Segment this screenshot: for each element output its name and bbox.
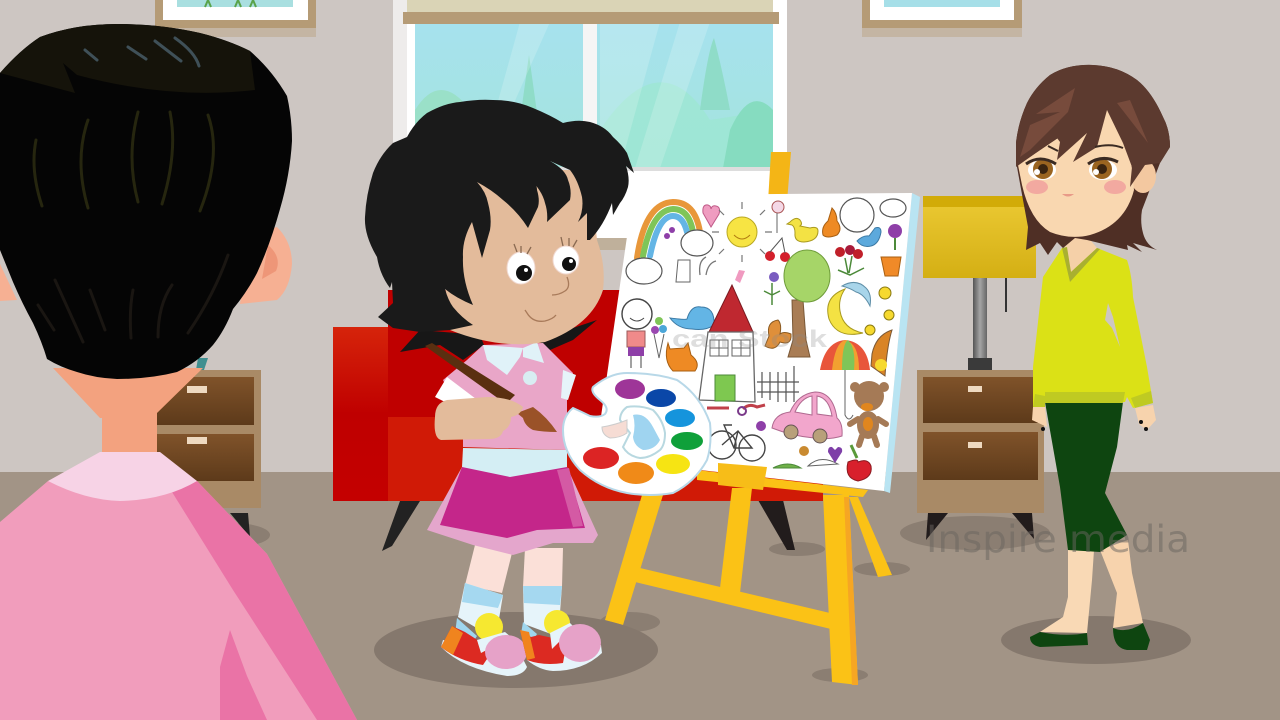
bicycle bbox=[708, 425, 765, 461]
boy right ear bbox=[240, 227, 292, 304]
girl back hair locks bbox=[400, 320, 597, 360]
woman legs bbox=[1040, 540, 1143, 633]
woman mouth bbox=[1062, 194, 1074, 196]
girl face bbox=[445, 170, 604, 344]
girl hand bbox=[435, 397, 523, 440]
girl skirt bbox=[427, 467, 598, 555]
woman bbox=[1016, 65, 1170, 650]
woman neck bbox=[1064, 236, 1097, 272]
woman fringe bbox=[1016, 65, 1170, 187]
woman ear bbox=[1130, 159, 1156, 193]
woman hair highlights bbox=[1020, 88, 1148, 157]
boy hair bbox=[0, 24, 292, 379]
woman sweater bbox=[1033, 248, 1153, 408]
easel tray bbox=[697, 463, 868, 497]
girl collar bbox=[483, 342, 544, 385]
woman hands bbox=[1032, 405, 1156, 430]
easel bbox=[600, 152, 910, 685]
easel back post bbox=[768, 152, 791, 202]
canvas with doodles bbox=[595, 193, 920, 493]
ice cream bbox=[651, 317, 667, 358]
girl nose and mouth bbox=[525, 277, 569, 321]
sofa bbox=[333, 290, 825, 556]
woman cheeks bbox=[1026, 180, 1126, 194]
clouds bbox=[626, 198, 906, 284]
girl eyes bbox=[507, 237, 579, 284]
video watermark: Inspire media bbox=[926, 517, 1190, 561]
car bbox=[772, 392, 842, 443]
boy collar bbox=[48, 452, 197, 501]
stars bbox=[865, 287, 894, 335]
palette bbox=[563, 373, 711, 495]
fence bbox=[757, 366, 799, 402]
sun bbox=[712, 202, 772, 262]
girl bodice bbox=[435, 343, 576, 477]
girl belt bbox=[462, 448, 567, 477]
boy neck bbox=[53, 368, 203, 456]
woman nails bbox=[1041, 420, 1148, 431]
stick child bbox=[622, 299, 652, 368]
cat bbox=[666, 343, 697, 371]
butterfly bbox=[765, 320, 791, 348]
girl hair bbox=[365, 100, 634, 332]
easel right leg bbox=[823, 495, 858, 685]
woman collar bbox=[1062, 247, 1100, 282]
bouquet bbox=[835, 245, 864, 275]
easel left leg bbox=[605, 495, 663, 625]
girl sleeves bbox=[435, 377, 480, 402]
window landscape bbox=[415, 22, 773, 168]
easel crossbar bbox=[635, 568, 831, 629]
woman eyes bbox=[1026, 145, 1123, 180]
canvas watermark: can Stock bbox=[672, 326, 828, 353]
floor bbox=[0, 472, 1280, 720]
small doodles top row bbox=[664, 201, 902, 305]
umbrella bbox=[820, 340, 870, 419]
tree bbox=[784, 250, 830, 357]
wall bbox=[0, 0, 1280, 473]
boy hair strands bbox=[34, 38, 228, 342]
boy sweater bbox=[0, 481, 357, 720]
purple heart bbox=[828, 447, 842, 463]
candy row bbox=[707, 405, 765, 409]
boy foreground bbox=[0, 24, 357, 720]
whale bbox=[670, 307, 714, 330]
girl socks bbox=[455, 583, 562, 648]
woman shadow bbox=[1001, 616, 1191, 664]
picture frame left bbox=[155, 0, 316, 37]
house bbox=[699, 285, 755, 402]
easel centre leg bbox=[720, 488, 752, 593]
easel rear leg bbox=[849, 497, 892, 577]
comet bbox=[871, 330, 892, 376]
woman face bbox=[1018, 105, 1134, 237]
grass and hedgehog bbox=[773, 464, 801, 468]
boy left ear bbox=[0, 264, 17, 301]
lamp bbox=[923, 196, 1036, 370]
nightstand left bbox=[150, 358, 270, 547]
girl shadow bbox=[374, 612, 658, 688]
nightstand right bbox=[900, 370, 1050, 550]
moon bbox=[828, 282, 870, 334]
apple bbox=[847, 460, 871, 481]
teddy bear bbox=[850, 381, 889, 445]
girl bbox=[365, 100, 711, 676]
paint brush bbox=[425, 343, 557, 432]
boy hair top sheen bbox=[0, 24, 255, 93]
rainbow doodle bbox=[637, 202, 700, 258]
woman shoes bbox=[1030, 623, 1150, 650]
boy sweater shading bbox=[172, 481, 357, 720]
window bbox=[393, 0, 787, 250]
girl legs bbox=[465, 545, 563, 593]
picture frame right bbox=[862, 0, 1022, 37]
woman trousers bbox=[1045, 402, 1127, 552]
girl shoes bbox=[441, 610, 602, 676]
heart bbox=[703, 205, 720, 227]
woman back hair bbox=[1016, 65, 1170, 255]
woman ribbing bbox=[1033, 391, 1153, 408]
